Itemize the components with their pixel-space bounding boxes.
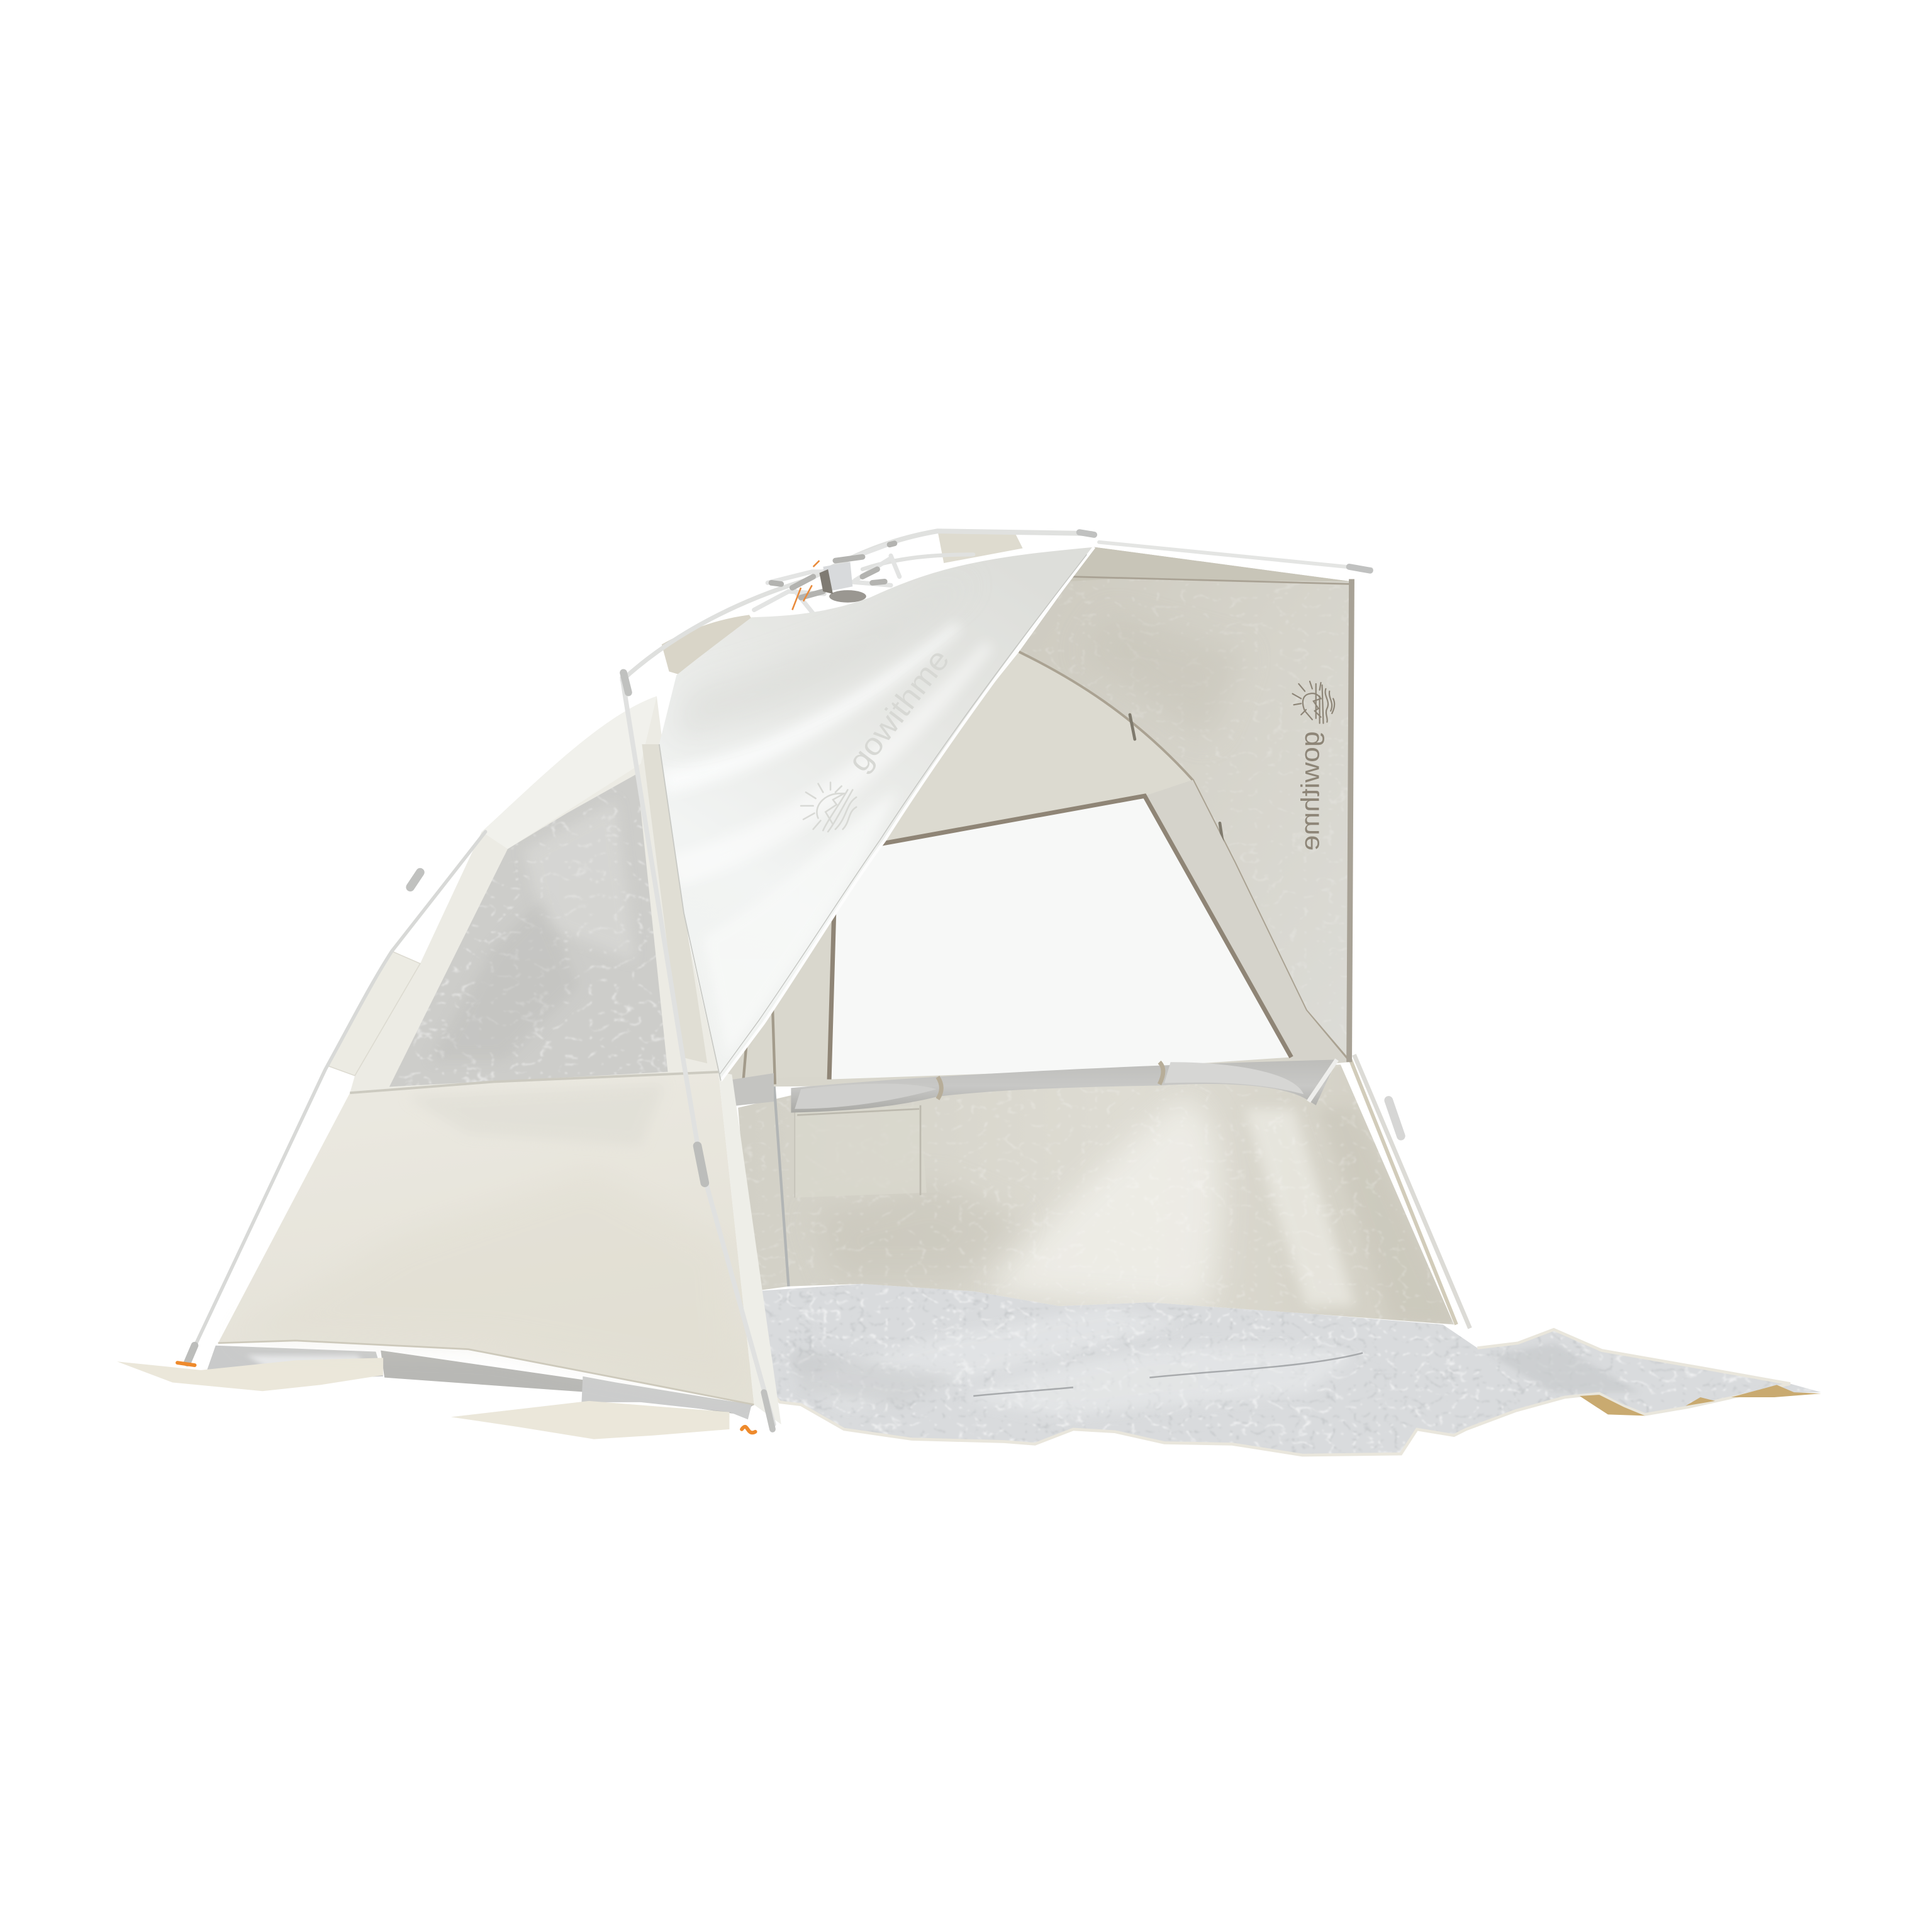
right rear pole: [1351, 1055, 1470, 1328]
storage pocket: [795, 1105, 927, 1198]
foot connector: [764, 1392, 773, 1429]
ground sheet floor: [750, 1284, 1821, 1457]
left roll stub: [723, 1073, 774, 1107]
white rear window: [829, 796, 1292, 1080]
right panel edge: [1349, 579, 1352, 1062]
silver flap lining left: [207, 1346, 383, 1380]
shoulder band above mesh: [482, 696, 657, 849]
window border: [829, 796, 1292, 1080]
lower wall panel: [218, 1072, 754, 1405]
right strip of side wall: [718, 1072, 781, 1424]
logo mark on hood: [801, 783, 856, 832]
end connectors: [1080, 532, 1370, 571]
brand text on hood: gowithme: [842, 643, 956, 778]
window strip: [1144, 780, 1349, 1062]
orange stake hooks: [177, 1363, 756, 1432]
tan underside of sheet: [1580, 1395, 1645, 1415]
floor hem: [749, 1329, 1790, 1455]
orange cords: [792, 561, 819, 610]
left ground flaps: [117, 1346, 754, 1439]
left interior panel: [739, 908, 837, 1078]
interior base fill: [721, 547, 1352, 1086]
rear interior: [721, 542, 1361, 1086]
right flap: [451, 1401, 729, 1439]
mirrored logo on rear panel: [1293, 681, 1334, 723]
roof sleeve patches: [662, 531, 1023, 675]
floor creases: [973, 1353, 1363, 1396]
rear roof panel: [1019, 547, 1352, 1061]
waist seam: [350, 1072, 718, 1093]
silver flap lining right: [581, 1376, 752, 1419]
upper wall panel: [350, 696, 718, 1093]
bottom hem: [218, 1341, 754, 1405]
pole connector: [410, 873, 420, 887]
centre pole: [622, 673, 774, 1429]
under-arch panel: [850, 652, 1193, 863]
front hood canopy: [659, 547, 1094, 1081]
hood sheen streaks: [659, 622, 961, 795]
gap shadow under side wall: [381, 1351, 754, 1414]
zipper hooks: [1130, 715, 1224, 847]
foot connector: [187, 1346, 194, 1363]
mesh window: [389, 774, 668, 1086]
rolled window flap: [723, 1059, 1337, 1113]
interior left post: [743, 1007, 775, 1085]
roll ties: [937, 1062, 1163, 1099]
top connector: [623, 673, 628, 693]
tent product illustration: [117, 528, 1821, 1457]
arch seam: [1019, 652, 1349, 1061]
middle connector: [698, 1146, 705, 1183]
left flap: [117, 1358, 383, 1391]
left side wall: [218, 696, 781, 1424]
left arc pole: [187, 832, 486, 1363]
upper rear band: [1066, 547, 1352, 581]
strip next to pole: [642, 744, 707, 1063]
top frame arcs: [622, 531, 1371, 680]
pole joint: [1388, 1100, 1401, 1136]
back lower wall: [738, 1059, 1466, 1331]
vertical zipper seam: [774, 1081, 788, 1287]
central hub mechanism: [754, 544, 900, 613]
mirrored brand text: gowithme: [1296, 731, 1325, 851]
sleeve patch: [328, 951, 420, 1076]
hood hem stitching: [721, 547, 1094, 1081]
